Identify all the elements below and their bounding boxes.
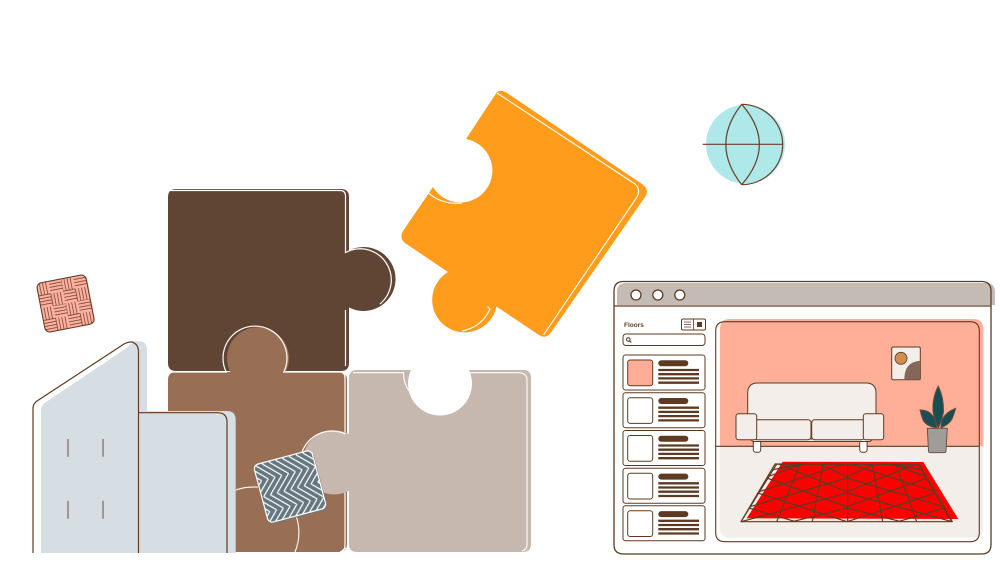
potted plant [920,386,956,453]
floor swatch: basket weave [36,274,96,333]
sofa [736,383,884,452]
list card 1 [623,355,705,390]
browser header bar [617,283,995,305]
room floor [720,446,983,538]
puzzle piece: medium brown [168,326,349,552]
list card 4 [623,468,705,503]
sidebar heading: Floors [624,322,644,329]
browser window mockup [614,282,995,554]
building outline [33,342,227,553]
building fill [41,341,236,553]
icon: globe [703,104,785,185]
list card 2 [623,393,705,428]
puzzle piece: orange [401,91,647,337]
rug outline [741,464,952,522]
room outline [716,322,979,542]
rug line pattern [742,464,952,522]
list card 3 [623,430,705,466]
room preview panel [716,319,983,542]
building windows [68,439,103,519]
rug red fill [747,462,958,519]
puzzle piece: dark brown [168,189,396,371]
building: tall tower and low block [33,341,236,553]
room wall [720,319,983,446]
browser window buttons [631,290,685,300]
view toggle [682,319,706,330]
browser outline [614,282,991,554]
rug [740,462,958,522]
search box [623,334,705,346]
wall picture [892,347,920,380]
floor swatch: herringbone [253,449,328,525]
list card 5 [623,506,705,541]
puzzle piece: taupe [302,370,531,552]
